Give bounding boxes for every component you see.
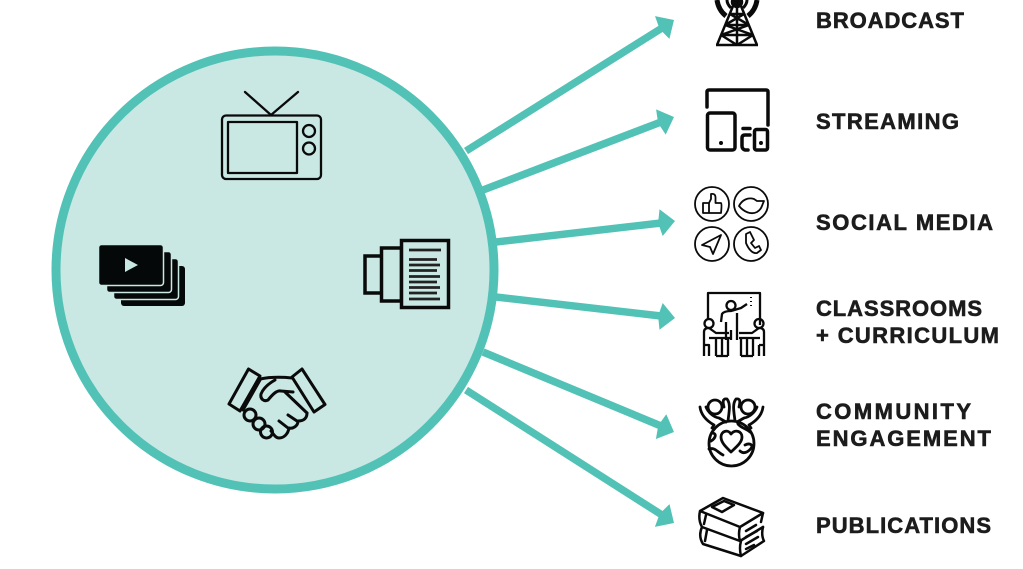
icon: community globe xyxy=(700,399,763,466)
label: community engagement: ENGAGEMENT xyxy=(816,426,992,451)
icon: streaming devices xyxy=(707,90,768,150)
arrow: to classrooms xyxy=(496,297,675,330)
icon: documents xyxy=(365,240,448,308)
icon: books xyxy=(699,498,764,556)
label: community engagement xyxy=(816,399,992,451)
label: classrooms + curriculum: CLASSROOMS xyxy=(816,296,982,321)
label: streaming: STREAMING xyxy=(816,109,959,134)
icon: broadcast tower xyxy=(716,0,758,45)
icon: social media circles xyxy=(695,187,768,261)
icon: handshake xyxy=(229,369,325,438)
arrow: to social media xyxy=(496,209,675,242)
arrow: to community xyxy=(483,352,674,439)
arrow: to publications xyxy=(466,390,674,527)
label: social media: SOCIAL MEDIA xyxy=(816,210,993,235)
icon: classroom xyxy=(704,293,764,356)
icon: television xyxy=(222,92,321,179)
arrow: to streaming xyxy=(483,109,674,190)
label: classrooms + curriculum xyxy=(816,296,999,348)
label: broadcast: BROADCAST xyxy=(816,8,965,33)
central circle xyxy=(56,51,494,489)
label: classrooms + curriculum: + CURRICULUM xyxy=(816,323,999,348)
arrow: to broadcast xyxy=(466,16,674,151)
label: publications: PUBLICATIONS xyxy=(816,513,991,538)
label: community engagement: COMMUNITY xyxy=(816,399,971,424)
icon: video stack xyxy=(98,244,185,306)
